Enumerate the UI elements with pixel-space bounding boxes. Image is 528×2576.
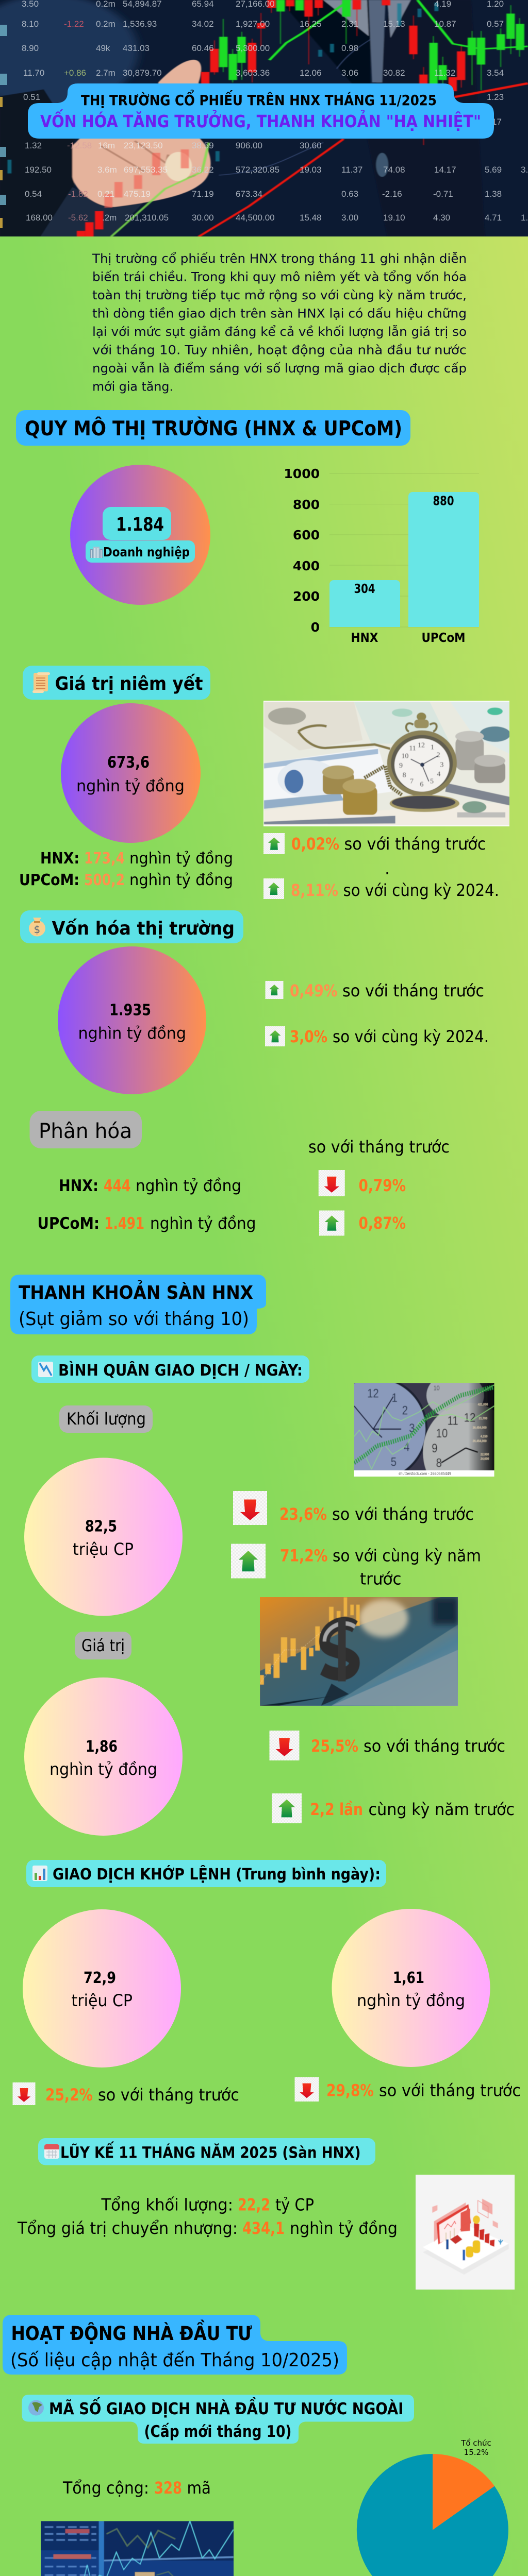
circle: listed value: 673,6 <box>107 753 150 772</box>
hero photo: stock chart and businessman: 17 <box>492 117 502 127</box>
hero photo: stock chart and businessman: 15.13 <box>383 19 405 29</box>
hero photo: stock chart and businessman: 168.00 <box>26 213 53 223</box>
hero photo: stock chart and businessman: 5,300.00 <box>236 43 270 53</box>
HNX and UPCoM listed values <box>19 850 233 889</box>
icon: up arrow <box>263 878 284 899</box>
row: UPCoM market cap: nghìn tỷ đồng <box>150 1214 256 1233</box>
heading: thanh khoản sàn HNX: (Sụt giảm so với tháng 10) <box>19 1309 249 1330</box>
circle: average value: 1,86 <box>86 1738 118 1756</box>
row: HNX market cap <box>59 1177 241 1195</box>
hero photo: stock chart and businessman: .2m <box>102 213 117 223</box>
value: 0,79%: 0,79% <box>359 1176 406 1195</box>
icon: calendar <box>44 2144 59 2159</box>
change: 23,6% month on month: 23,6% <box>279 1504 327 1524</box>
silver coin tops <box>455 731 505 783</box>
watch: 6 <box>420 781 423 789</box>
pie chart: foreign investor codes: 15.2% <box>464 2448 488 2457</box>
change: 25,2% <box>45 2085 239 2105</box>
heading: vốn hóa thị trường <box>20 910 243 943</box>
bar chart: listed companies: 800 <box>293 497 320 512</box>
hero photo: stock chart and businessman: 3.54 <box>487 68 504 78</box>
photo: clocks and stock chart: 8 <box>436 1456 442 1470</box>
hero photo: stock chart and businessman: 1,927.00 <box>236 19 270 29</box>
heading: thanh khoản sàn HNX: THANH KHOẢN SÀN HNX <box>19 1280 253 1303</box>
change: 71,2% year on year <box>280 1546 481 1589</box>
cumulative totals <box>17 2195 398 2238</box>
cumulative totals: Tổng khối lượng: <box>101 2195 233 2214</box>
circle: total companies: Doanh nghiệp <box>103 545 190 560</box>
cumulative totals: tỷ CP <box>275 2195 314 2214</box>
hero photo: stock chart and businessman: 8.10 <box>22 19 39 29</box>
hero photo: stock chart and businessman: 23,123.50 <box>124 141 163 150</box>
bar: HNX: 304 <box>354 581 375 596</box>
hero photo: stock chart and businessman: -1.22 <box>64 19 84 29</box>
photo: clocks and stock chart: 4,150 <box>481 1435 488 1438</box>
hero photo: stock chart and businessman: -5.62 <box>68 213 88 223</box>
circle: matched value: nghìn tỷ đồng <box>357 1991 465 2010</box>
photo: clocks and stock chart: 2 <box>402 1403 408 1417</box>
hero photo: stock chart and businessman: -12.58 <box>67 141 92 150</box>
hero photo: stock chart and businessman: 4.71 <box>485 213 502 223</box>
cumulative totals: 434,1 <box>242 2218 285 2238</box>
heading: hoạt động nhà đầu tư: (Số liệu cập nhật đến Tháng 10/2025) <box>10 2350 339 2371</box>
circle: market cap: nghìn tỷ đồng <box>78 1024 186 1043</box>
circle: matched volume: triệu CP <box>71 1991 133 2010</box>
silver coins <box>455 737 484 770</box>
hero photo: stock chart and businessman: -0.71 <box>433 189 453 199</box>
HNX and UPCoM listed values: 500,2 <box>84 871 125 889</box>
icon: money bag: $ <box>34 923 40 936</box>
HNX and UPCoM listed values: nghìn tỷ đồng <box>129 871 233 889</box>
label: khối lượng: Khối lượng <box>67 1409 146 1429</box>
hero photo: stock chart and businessman: 1.32 <box>25 141 42 150</box>
illustration: isometric finance <box>416 2175 515 2290</box>
heading: hoạt động nhà đầu tư: HOẠT ĐỘNG NHÀ ĐẦU TƯ <box>11 2319 252 2345</box>
hero photo: stock chart and businessman: 74.08 <box>383 165 405 175</box>
hero photo: stock chart and businessman: 38.59 <box>192 141 214 150</box>
intro paragraph: thì dòng tiền giao dịch trên sàn HNX lại có dấu hiệu chững <box>92 306 467 320</box>
change: 0,49% month on month: so với tháng trước <box>342 981 484 1001</box>
photo: clocks and stock chart: 10 <box>434 1384 440 1392</box>
heading: lũy kế 11 tháng <box>38 2138 375 2165</box>
hero photo: stock chart and businessman: 0.57 <box>487 19 504 29</box>
change: 2,2 lần year on year: cùng kỳ năm trước <box>368 1800 515 1819</box>
watch: 3 <box>440 761 443 769</box>
icon: up arrow <box>265 981 284 999</box>
pie chart: foreign investor codes <box>357 2438 508 2576</box>
hero photo: stock chart and businessman: 8.90 <box>22 43 39 53</box>
circle: listed value: nghìn tỷ đồng <box>76 777 185 795</box>
photo: dollar sign and bars <box>260 1591 458 1706</box>
change: 0,02% month on month: so với tháng trước <box>344 834 486 854</box>
hero photo: stock chart and businessman: 34.02 <box>192 19 214 29</box>
heading: bình quân giao dịch ngày <box>31 1355 309 1383</box>
total codes: Tổng cộng: <box>62 2478 149 2498</box>
change: 8,11% year on year: 8,11% <box>291 880 338 900</box>
watch <box>387 713 459 812</box>
watch: 12 <box>418 742 425 750</box>
hero photo: stock chart and businessman: 0.2m <box>96 19 116 29</box>
row: UPCoM market cap: UPCoM: <box>37 1214 100 1233</box>
hero photo: stock chart and businessman: 16m <box>98 141 115 150</box>
watch: 9 <box>399 762 403 770</box>
intro paragraph: toàn thị trường tiếp tục mở rộng so với cùng kỳ năm trước, <box>92 288 467 302</box>
icon: falling chart <box>38 1362 53 1377</box>
circle: matched value <box>332 1909 490 2067</box>
change: 8,11% year on year <box>291 880 499 900</box>
photo: clocks and stock chart: 3 <box>409 1421 415 1435</box>
HNX and UPCoM listed values: UPCoM: <box>19 871 79 889</box>
row: UPCoM market cap <box>37 1214 256 1233</box>
change: 0,49% month on month: 0,49% <box>290 981 337 1001</box>
hero photo: stock chart and businessman: 30.82 <box>383 68 405 78</box>
hero photo: stock chart and businessman: 0.54 <box>25 189 42 199</box>
hero photo: stock chart and businessman: 30.60 <box>300 141 322 150</box>
intro paragraph <box>92 251 467 394</box>
photo: clocks and stock chart: 5 <box>391 1455 397 1469</box>
HNX and UPCoM listed values: 173,4 <box>84 850 125 868</box>
photo: coin stacks and chart <box>41 2521 234 2576</box>
hero photo: stock chart and businessman: 3.06 <box>341 68 358 78</box>
hero photo: stock chart and businessman: 49k <box>96 43 110 53</box>
heading: giá trị niêm yết <box>23 666 210 700</box>
hero photo: stock chart and businessman: 3,603.36 <box>236 68 270 78</box>
circle: average volume: 82,5 <box>85 1518 117 1535</box>
hero photo: stock chart and businessman: 0.51 <box>23 92 40 102</box>
hero photo: stock chart and businessman: 906.00 <box>236 141 262 150</box>
hero photo: stock chart and businessman: 30,879.70 <box>123 68 162 78</box>
hero photo: stock chart and businessman: 1.38 <box>485 189 502 199</box>
stray dot: . <box>385 859 390 878</box>
intro paragraph: ngoài vẫn là điểm sáng với số lượng mã giao dịch được cấp <box>92 361 467 376</box>
circle: average value <box>24 1677 183 1836</box>
watch: 4 <box>437 771 440 778</box>
cumulative totals: 22,2 <box>238 2195 270 2214</box>
change: 25,2%: so với tháng trước <box>98 2085 239 2105</box>
circle: listed value <box>61 703 201 843</box>
hero photo: stock chart and businessman: 14.17 <box>434 165 456 175</box>
title banner <box>28 83 494 139</box>
hero photo: stock chart and businessman: 1,536.93 <box>123 19 157 29</box>
column heading: compared with last month: so với tháng trước <box>308 1137 450 1157</box>
heading: giá trị niêm yết: Giá trị niêm yết <box>55 673 203 694</box>
label: phân hóa <box>30 1111 142 1148</box>
icon: scroll <box>32 672 50 693</box>
label: giá trị: Giá trị <box>81 1636 125 1655</box>
hero photo: stock chart and businessman: 0.21 <box>97 189 114 199</box>
icon: up arrow <box>263 833 285 854</box>
hero photo: stock chart and businessman: 19.03 <box>300 165 322 175</box>
HNX and UPCoM listed values: nghìn tỷ đồng <box>129 850 233 868</box>
circle: average value: nghìn tỷ đồng <box>50 1759 157 1779</box>
watch: 10 <box>401 752 408 760</box>
change: 2,2 lần year on year: 2,2 lần <box>310 1800 363 1819</box>
bar chart: listed companies: 0 <box>311 620 320 635</box>
icon: up arrow <box>272 1793 302 1823</box>
watch: 8 <box>403 772 406 779</box>
icon: down arrow <box>319 1170 345 1196</box>
hero photo: stock chart and businessman: 11.32 <box>434 68 455 78</box>
change: 25,2%: 25,2% <box>45 2085 93 2105</box>
intro paragraph: với tháng 10. Tuy nhiên, hoạt động của nhà đầu tư nước <box>92 343 467 358</box>
watch: 1 <box>431 744 434 752</box>
circle: matched volume <box>23 1909 181 2067</box>
bar chart: listed companies: UPCoM <box>422 630 465 645</box>
hero photo: stock chart and businessman: 30.00 <box>192 213 214 223</box>
heading: quy mô thị trường: QUY MÔ THỊ TRƯỜNG (HNX & UPCoM) <box>25 416 402 440</box>
intro paragraph: mới gia tăng. <box>92 379 173 394</box>
heading: mã số giao dịch nhà đầu tư nước ngoài: MÃ SỐ GIAO DỊCH NHÀ ĐẦU TƯ NƯỚC NGOÀI <box>49 2397 403 2418</box>
row: HNX market cap: 444 <box>104 1177 131 1195</box>
hero photo: stock chart and businessman: 3.6m <box>97 165 117 175</box>
change: 23,6% month on month: so với tháng trước <box>332 1504 474 1524</box>
hero photo: stock chart and businessman: 201,310.05 <box>125 213 169 223</box>
hero photo: stock chart and businessman: 4.30 <box>433 213 450 223</box>
total codes: 328 <box>154 2478 182 2498</box>
photo: clocks and stock chart: 36,454,000 <box>473 1427 487 1430</box>
heading: quy mô thị trường <box>16 410 410 446</box>
change: 8,11% year on year: so với cùng kỳ 2024. <box>343 880 499 900</box>
hero photo: stock chart and businessman: -2.16 <box>382 189 402 199</box>
hero photo: stock chart and businessman: 60.46 <box>192 43 214 53</box>
hero photo: stock chart and businessman: 36.22 <box>192 165 214 175</box>
icon: down arrow <box>295 2077 319 2102</box>
row: HNX market cap: HNX: <box>59 1177 98 1195</box>
heading: lũy kế 11 tháng: LŨY KẾ 11 THÁNG NĂM 2025 (Sàn HNX) <box>60 2141 361 2162</box>
photo: clocks and stock chart: 26,454,000 <box>473 1440 487 1443</box>
hero photo: stock chart and businessman: 11.37 <box>341 165 362 175</box>
change: 2,2 lần year on year <box>310 1800 515 1819</box>
hero photo: stock chart and businessman: 697,553.35 <box>124 165 168 175</box>
circle: market cap: 1.935 <box>109 1002 151 1019</box>
change: 29,8%: 29,8% <box>326 2080 374 2100</box>
bar chart: listed companies <box>284 466 479 645</box>
hero photo: stock chart and businessman: 2.7m <box>96 68 116 78</box>
heading: vốn hóa thị trường: Vốn hóa thị trường <box>52 918 235 939</box>
change: 25,5% month on month: so với tháng trước <box>364 1736 505 1756</box>
icon: down arrow <box>12 2082 35 2105</box>
hand <box>72 60 211 207</box>
hero photo: stock chart and businessman: 1. <box>521 213 528 223</box>
intro paragraph: lại với mức sụt giảm đáng kể cả về khối lượng lẫn giá trị so <box>92 324 467 339</box>
circle: matched volume: 72,9 <box>84 1969 116 1987</box>
gold coins <box>322 766 377 815</box>
intro paragraph: Thị trường cổ phiếu trên HNX trong tháng 11 ghi nhận diễn <box>92 251 467 266</box>
hero photo: stock chart and businessman: 2.31 <box>341 19 358 29</box>
bar chart: listed companies: 1000 <box>284 466 320 481</box>
total codes <box>62 2478 211 2498</box>
photo: clocks and stock chart: 12 <box>464 1411 475 1425</box>
hero photo: stock chart and businessman: 0.98 <box>341 43 358 53</box>
hero photo: stock chart and businessman <box>0 0 528 237</box>
photo: clocks and stock chart: 11 <box>448 1414 458 1428</box>
hero photo: stock chart and businessman: 19.10 <box>383 213 405 223</box>
photo: clocks and stock chart: 22,900 <box>481 1453 489 1456</box>
watch: 7 <box>410 778 414 786</box>
row: HNX market cap: nghìn tỷ đồng <box>136 1177 241 1195</box>
change: 3,0% year on year: so với cùng kỳ 2024. <box>333 1027 489 1046</box>
hero photo: stock chart and businessman: 15.48 <box>300 213 322 223</box>
circle: total companies: 1.184 <box>116 514 164 535</box>
bar chart: listed companies: HNX <box>351 630 378 645</box>
hero photo: stock chart and businessman: 71.19 <box>192 189 214 199</box>
bar: UPCoM <box>408 492 479 627</box>
icon: office building <box>90 547 103 558</box>
hero photo: stock chart and businessman: 5.69 <box>485 165 502 175</box>
icon: up arrow <box>319 1211 344 1235</box>
hero photo: stock chart and businessman: 572,320.85 <box>236 165 279 175</box>
hero photo: stock chart and businessman: 12.06 <box>300 68 322 78</box>
label: khối lượng <box>59 1405 153 1433</box>
hero photo: stock chart and businessman: 10.87 <box>434 19 456 29</box>
photo: clocks and stock chart: 21,700 <box>478 1417 488 1420</box>
heading: giao dịch khớp lệnh <box>26 1860 386 1887</box>
change: 29,8%: so với tháng trước <box>379 2080 521 2100</box>
change: 0,02% month on month <box>291 834 486 854</box>
HNX and UPCoM listed values: HNX: <box>40 850 79 868</box>
heading: mã số giao dịch nhà đầu tư nước ngoài <box>22 2395 414 2444</box>
label: giá trị <box>75 1632 131 1659</box>
hero photo: stock chart and businessman: 192.50 <box>25 165 52 175</box>
photo: clocks and stock chart: 1 <box>391 1391 398 1404</box>
hero photo: stock chart and businessman: 0.63 <box>341 189 358 199</box>
change: 25,5% month on month: 25,5% <box>311 1736 358 1756</box>
icon: bar chart <box>32 1866 47 1881</box>
icon: globe <box>28 2400 44 2415</box>
change: 71,2% year on year: trước <box>360 1569 401 1589</box>
photo: clocks and stock chart: 4 <box>404 1440 409 1454</box>
cumulative totals: nghìn tỷ đồng <box>290 2218 398 2238</box>
photo: clocks and stock chart: 12 <box>367 1386 379 1400</box>
change: 3,0% year on year: 3,0% <box>290 1027 327 1046</box>
hero photo: stock chart and businessman: -1.82 <box>68 189 88 199</box>
bar chart: listed companies: 200 <box>293 589 320 604</box>
bar chart: listed companies: 400 <box>293 558 320 573</box>
hero photo: stock chart and businessman: 431.03 <box>123 43 150 53</box>
bar: HNX <box>329 580 400 627</box>
hero photo: stock chart and businessman: 673.34 <box>236 189 262 199</box>
photo: clocks and stock chart: 421,000 <box>478 1403 488 1406</box>
hero photo: stock chart and businessman: 44,500.00 <box>236 213 275 223</box>
heading: thanh khoản sàn HNX <box>10 1275 266 1334</box>
hero photo: stock chart and businessman: 3.00 <box>341 213 358 223</box>
photo: clocks and stock chart <box>324 1372 515 1502</box>
heading: mã số giao dịch nhà đầu tư nước ngoài: (Cấp mới tháng 10) <box>144 2422 292 2441</box>
circle: total companies <box>70 465 210 605</box>
title line 1: THỊ TRƯỜNG CỔ PHIẾU TRÊN HNX THÁNG 11/2025 <box>81 88 437 109</box>
photo: clocks and stock chart: shutterstock.com - 2660585449 <box>399 1471 451 1476</box>
value: 0,87%: 0,87% <box>359 1213 406 1233</box>
candlesticks <box>220 0 524 90</box>
hero photo: stock chart and businessman: 16.25 <box>300 19 322 29</box>
photo: clocks and stock chart: 9 <box>432 1441 437 1455</box>
circle: matched value: 1,61 <box>393 1969 424 1987</box>
photo: clocks and stock chart: 24,600 <box>481 1458 489 1461</box>
bar: UPCoM: 880 <box>433 494 454 508</box>
hero photo: stock chart and businessman: 11.70 <box>23 68 44 78</box>
watch: 2 <box>437 751 440 759</box>
icon: down arrow <box>269 1731 299 1760</box>
hero photo: stock chart and businessman: 1.23 <box>487 92 504 102</box>
intro paragraph: biến trái chiều. Trong khi quy mô niêm yết và tổng vốn hóa <box>92 270 467 284</box>
hero photo: stock chart and businessman: 475.19 <box>124 189 151 199</box>
bar chart: listed companies: 600 <box>293 528 320 543</box>
hero photo: stock chart and businessman: 3. <box>521 165 528 175</box>
circle: average volume: triệu CP <box>73 1539 134 1559</box>
pie chart: foreign investor codes: Tổ chức <box>460 2438 491 2448</box>
watch: 11 <box>409 745 416 753</box>
change: 71,2% year on year: 71,2% <box>280 1546 328 1565</box>
icon: up arrow <box>231 1544 266 1579</box>
heading: bình quân giao dịch ngày: BÌNH QUÂN GIAO DỊCH / NGÀY: <box>58 1361 303 1380</box>
photo: clocks and stock chart: 10 <box>436 1426 448 1440</box>
total codes: mã <box>187 2478 211 2498</box>
watch: 5 <box>430 778 434 786</box>
icon: up arrow <box>265 1026 285 1046</box>
cumulative totals: Tổng giá trị chuyển nhượng: <box>17 2218 238 2238</box>
circle: market cap <box>58 946 206 1094</box>
heading: giao dịch khớp lệnh: GIAO DỊCH KHỚP LỆNH (Trung bình ngày): <box>53 1865 381 1884</box>
photo: pocket watch and money <box>263 701 510 826</box>
hero photo: stock chart and businessman: +0.86 <box>64 68 86 78</box>
circle: average volume <box>24 1458 183 1616</box>
label: phân hóa: Phân hóa <box>39 1120 132 1143</box>
icon: down arrow <box>233 1491 267 1525</box>
change: 0,02% month on month: 0,02% <box>291 834 339 854</box>
row: UPCoM market cap: 1.491 <box>104 1214 144 1233</box>
icon: money bag <box>29 918 45 937</box>
heading: hoạt động nhà đầu tư <box>3 2315 347 2375</box>
change: 71,2% year on year: so với cùng kỳ năm <box>333 1546 481 1565</box>
